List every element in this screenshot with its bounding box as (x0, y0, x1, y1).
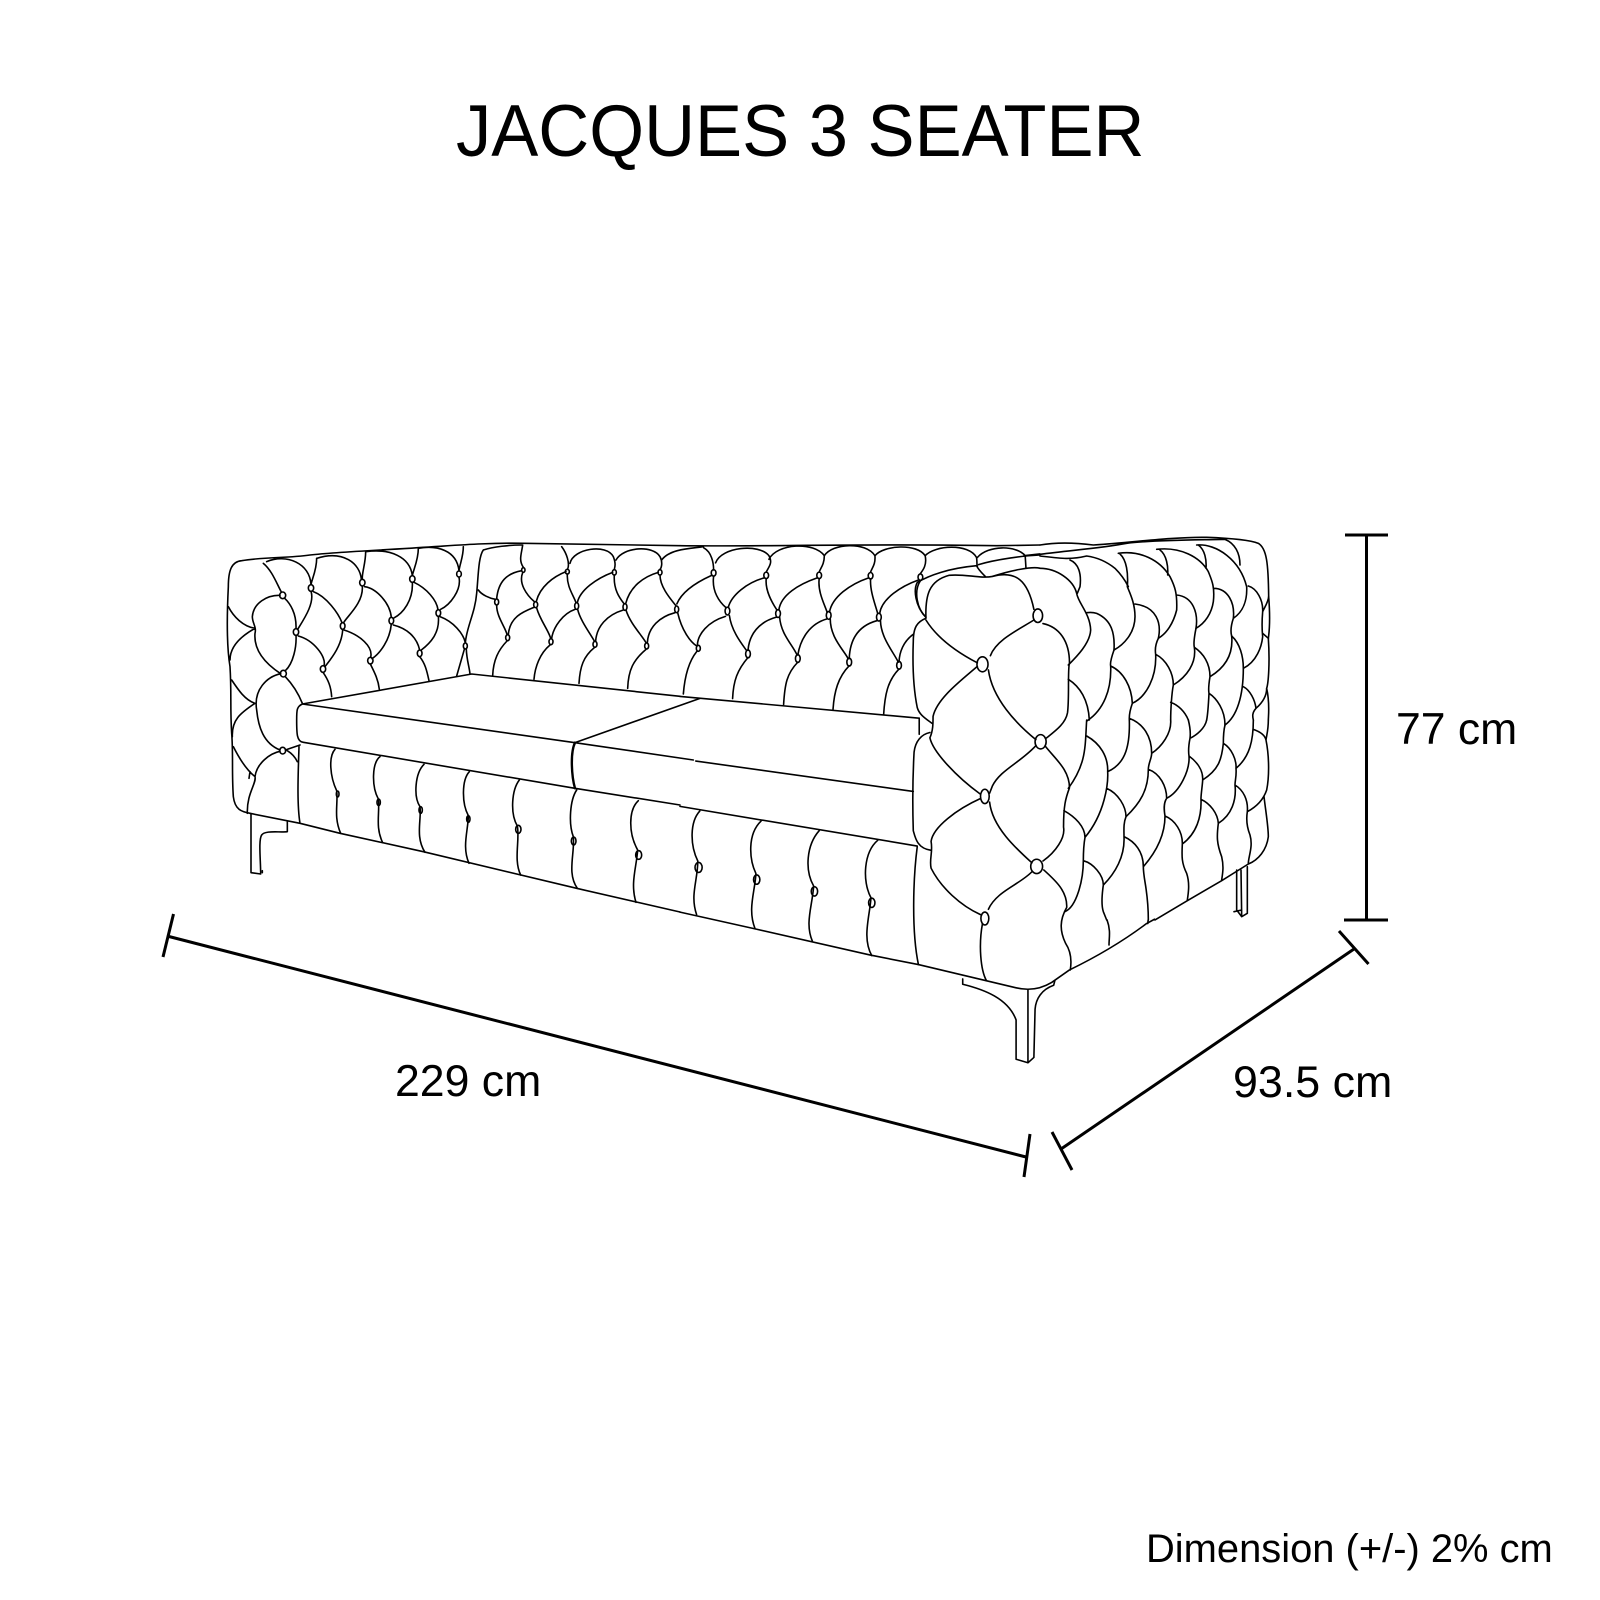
upper side lobes (1040, 545, 1269, 668)
dimension: width 229 cm (163, 914, 1030, 1177)
tuft buttons (695, 570, 1046, 925)
back tufting (677, 575, 926, 715)
arm front panel (913, 555, 1040, 965)
lower side lobes (1064, 718, 1269, 920)
back top lobes (704, 546, 1026, 574)
back right leg (1234, 867, 1247, 917)
back tufting left of corner (317, 547, 470, 689)
left leg (251, 814, 287, 874)
front right leg (963, 979, 1055, 1063)
front rail tufts (331, 749, 638, 902)
arm front tufting (926, 620, 1148, 981)
outer outline left and top (227, 543, 680, 813)
middle side lobes (1068, 628, 1267, 725)
tolerance note: Dimension (+/-) 2% cm (1146, 1527, 1553, 1571)
right corner and bottom edge (1155, 797, 1268, 920)
sofa line drawing (227, 537, 1270, 1063)
dimension: depth 93.5 cm (1052, 931, 1392, 1170)
top edges and outer right edge (1040, 537, 1270, 720)
top edges (680, 545, 1040, 556)
dimension: width 229 cm: 229 cm (395, 1057, 541, 1106)
sofa side panel lower tufting and back leg (1064, 718, 1269, 920)
sofa left section: left arm, back and seat (227, 543, 703, 912)
front rail tufts (680, 811, 918, 965)
seat cushion right part (680, 696, 919, 846)
lower outline (918, 919, 1154, 989)
sofa middle section: back, seat and right arm front (677, 545, 1154, 1063)
title: JACQUES 3 SEATER (456, 91, 1144, 172)
dimension: height 77 cm: 77 cm (1396, 705, 1517, 754)
dimension: depth 93.5 cm: 93.5 cm (1233, 1057, 1392, 1107)
seat cushions (297, 674, 700, 805)
left arm tufting (228, 558, 343, 813)
sofa side panel upper tufting (1040, 537, 1270, 725)
tuft buttons (280, 568, 700, 859)
back tufting right of corner (465, 545, 703, 694)
front rail (250, 747, 680, 912)
